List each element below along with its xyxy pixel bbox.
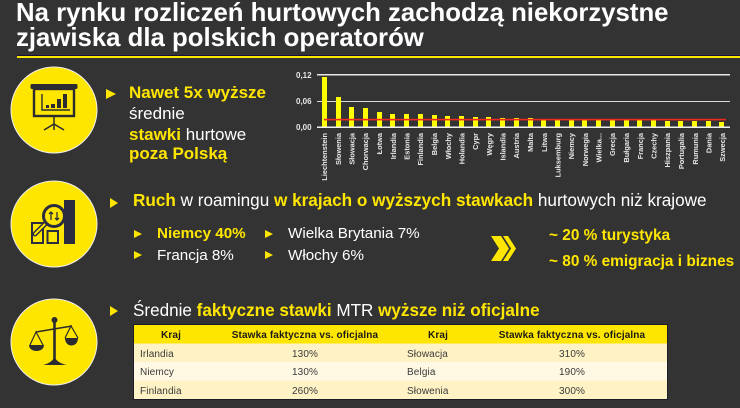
bar chart: wholesale rates by country: Islandia: [498, 132, 508, 161]
text block: wholesale rates: [106, 83, 266, 163]
bar chart: wholesale rates by country: Niemcy: [567, 132, 576, 159]
bar chart: wholesale rates by country: Włochy: [444, 132, 453, 159]
bar chart: wholesale rates by country: Portugalia: [677, 132, 686, 169]
table: actual vs official rates: 190%: [559, 367, 585, 378]
bar chart: wholesale rates by country: Belgia: [430, 132, 439, 155]
bar chart: wholesale rates by country: Chorwacja: [361, 132, 370, 170]
heading: roaming traffic: Ruch w roamingu w krajach o wyższych stawkach hurtowych niż krajowe: [133, 190, 707, 210]
icon: presentation board: [11, 67, 97, 153]
text block: traffic split: [549, 227, 734, 270]
icon: double chevron arrow: [491, 236, 516, 261]
text block: wholesale rates: poza Polską: [129, 144, 228, 163]
table: actual vs official rates: 260%: [292, 386, 318, 397]
bar chart: wholesale rates by country: 0,06: [296, 97, 312, 106]
list: roaming destinations: [134, 225, 420, 264]
list: roaming destinations: Francja 8%: [157, 247, 234, 264]
text block: traffic split: ~ 20 % turystyka: [549, 227, 670, 244]
table: actual vs official rates: 130%: [292, 349, 318, 360]
text block: wholesale rates: średnie: [129, 104, 185, 123]
title: zjawiska dla polskich operatorów: [16, 24, 425, 52]
text block: wholesale rates: stawki hurtowe: [129, 125, 246, 144]
bar chart: wholesale rates by country: Słowenia: [334, 132, 343, 165]
bar chart: wholesale rates by country: Liechtenstein: [320, 133, 329, 181]
heading: actual MTR rates: Średnie faktyczne stawki MTR wyższe niż oficjalne: [133, 301, 540, 320]
bar chart: wholesale rates by country: Finlandia: [416, 132, 425, 165]
bar chart: wholesale rates by country: Czechy: [650, 132, 658, 159]
bar chart: wholesale rates by country: Grecja: [608, 132, 617, 156]
text block: wholesale rates: Nawet 5x wyższe: [129, 83, 266, 102]
table: actual vs official rates: Słowenia: [407, 386, 449, 397]
bar chart: wholesale rates by country: 0,00: [296, 123, 312, 132]
title: [16, 0, 668, 52]
bar chart: wholesale rates by country: Estonia: [402, 132, 412, 160]
bar chart: wholesale rates by country: Wielka...: [594, 133, 604, 163]
bar chart: wholesale rates by country: Norwegia: [581, 132, 590, 166]
bar chart: wholesale rates by country: Rumunia: [691, 132, 700, 165]
bar chart: wholesale rates by country: Dania: [704, 132, 714, 153]
table: actual vs official rates: Kraj: [161, 330, 181, 341]
bar chart: wholesale rates by country: Irlandia: [389, 132, 398, 159]
table: actual vs official rates: 130%: [292, 367, 318, 378]
bar chart: wholesale rates by country: [296, 71, 730, 181]
list: roaming destinations: Niemcy 40%: [157, 225, 246, 242]
bar chart: wholesale rates by country: 0,12: [296, 71, 312, 80]
table: actual vs official rates: 300%: [559, 386, 585, 397]
bar chart: wholesale rates by country: Szwecja: [718, 132, 727, 162]
table: actual vs official rates: Finlandia: [140, 386, 182, 397]
list: roaming destinations: Włochy 6%: [288, 247, 364, 264]
bar chart: wholesale rates by country: Hiszpania: [663, 132, 672, 168]
bar chart: wholesale rates by country: Austria: [512, 132, 521, 158]
table: actual vs official rates: Słowacja: [407, 349, 448, 360]
bar chart: wholesale rates by country: Holandia: [458, 132, 466, 164]
table: actual vs official rates: Irlandia: [140, 349, 174, 360]
bar chart: wholesale rates by country: Węgry: [485, 132, 494, 156]
bar chart: wholesale rates by country: Malta: [526, 132, 535, 152]
table: actual vs official rates: Stawka faktyczna vs. oficjalna: [232, 330, 379, 341]
bar chart: wholesale rates by country: Łotwa: [375, 132, 384, 154]
table: actual vs official rates: 310%: [559, 349, 585, 360]
icon: magnifier over bars: [11, 181, 97, 267]
table: actual vs official rates: Stawka faktyczna vs. oficjalna: [499, 330, 646, 341]
bar chart: wholesale rates by country: Bułgaria: [622, 132, 631, 163]
table: actual vs official rates: Niemcy: [140, 367, 174, 378]
icon: scales: [11, 299, 97, 385]
bar chart: wholesale rates by country: Francja: [636, 132, 645, 159]
bar chart: wholesale rates by country: Luksemburg: [554, 133, 562, 177]
text block: traffic split: ~ 80 % emigracja i biznes: [549, 253, 734, 270]
table: actual vs official rates: Kraj: [428, 330, 448, 341]
table: actual vs official rates: Belgia: [407, 367, 436, 378]
table: actual vs official rates: [133, 324, 668, 400]
list: roaming destinations: Wielka Brytania 7%: [288, 225, 420, 242]
bar chart: wholesale rates by country: Litwa: [540, 132, 549, 152]
bar chart: wholesale rates by country: Cypr: [471, 133, 480, 150]
bar chart: wholesale rates by country: Słowacja: [348, 132, 356, 165]
